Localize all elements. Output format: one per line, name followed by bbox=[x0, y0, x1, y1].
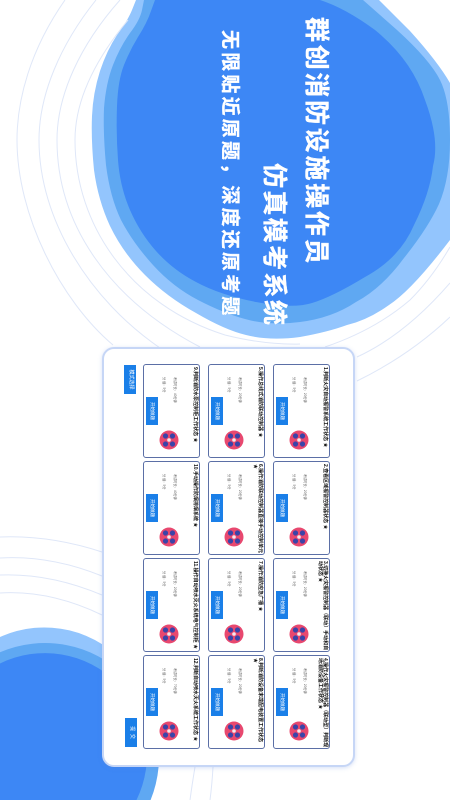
card 10: 开始做题 bbox=[150, 499, 155, 517]
button: mode select bbox=[124, 365, 136, 394]
button: submit: 提 交 bbox=[129, 726, 135, 739]
card 9: 分 值：5分 bbox=[162, 377, 166, 392]
card 11: 考试时长：20分钟 bbox=[173, 571, 177, 597]
top blob: middle layer bbox=[104, 0, 450, 323]
card 6 bbox=[208, 461, 265, 555]
bottom blob bbox=[0, 627, 159, 800]
panel: exam list bbox=[102, 347, 355, 767]
card 1: 开始做题 bbox=[280, 402, 285, 420]
card 9: 9.判断消防水泵控制柜工作状态 ★ bbox=[192, 367, 198, 443]
card 7: 考试时长：20分钟 bbox=[238, 571, 242, 597]
card 1 bbox=[273, 364, 330, 458]
subtitle: 无限贴近原题，深度还原考题 bbox=[219, 30, 240, 319]
button: mode select: 模式选择 bbox=[128, 369, 134, 390]
card 9: 考试时长：40分钟 bbox=[173, 377, 177, 403]
card 10: 分 值：5分 bbox=[162, 474, 166, 489]
card 4: 开始做题 bbox=[280, 693, 285, 711]
card 8: 8.判断消防设备末端配电装置工作状态 ★ bbox=[252, 658, 264, 742]
card 11: 分 值：5分 bbox=[162, 571, 166, 586]
card 5: 开始做题 bbox=[215, 402, 220, 420]
card 8: 分 值：5分 bbox=[227, 668, 231, 683]
card 5: 分 值：5分 bbox=[227, 377, 231, 392]
card 3: 考试时长：20分钟 bbox=[303, 571, 307, 597]
card 12: 12.判断自动喷水灭火系统工作状态 ★ bbox=[192, 658, 198, 741]
card 12 bbox=[143, 655, 200, 749]
card 1: 分 值：5分 bbox=[292, 377, 296, 392]
card 4: 分 值：5分 bbox=[292, 668, 296, 683]
card 7: 7.操作消防应急广播 ★ bbox=[258, 561, 264, 612]
card 2 bbox=[273, 461, 330, 555]
card 11: 11.操作自动喷水灭火系统电气控制柜 ★ bbox=[192, 561, 198, 649]
card 6: 分 值：5分 bbox=[227, 474, 231, 489]
card 10: 10.手动操作防烟排烟系统 ★ bbox=[192, 464, 198, 527]
card 9 bbox=[143, 364, 200, 458]
card 9: 开始做题 bbox=[150, 402, 155, 420]
card 10: 考试时长：40分钟 bbox=[173, 474, 177, 500]
card 2: 考试时长：20分钟 bbox=[303, 474, 307, 500]
card 12: 开始做题 bbox=[150, 693, 155, 711]
card 5: 5.操作总线式消防联动控制器 ★ bbox=[258, 367, 264, 438]
card 8: 考试时长：20分钟 bbox=[238, 668, 242, 694]
card 7: 开始做题 bbox=[215, 596, 220, 614]
title line 1: 群创消防设施操作员 bbox=[302, 17, 330, 266]
card 11 bbox=[143, 558, 200, 652]
card 6: 6.操作消防联动控制器直接手动控制单元 ★ bbox=[252, 464, 264, 553]
button: submit bbox=[126, 718, 137, 747]
card 8 bbox=[208, 655, 265, 749]
top blob: light layer bbox=[92, 0, 450, 339]
card 6: 开始做题 bbox=[215, 499, 220, 517]
card 7 bbox=[208, 558, 265, 652]
card 12: 考试时长：70分钟 bbox=[173, 668, 177, 694]
card 4: 考试时长：20分钟 bbox=[303, 668, 307, 694]
card 12: 分 值：5分 bbox=[162, 668, 166, 683]
card 3: 3.切换火灾报警控制器（联动）手动和自动状态 ★ bbox=[317, 561, 328, 650]
card 11: 开始做题 bbox=[150, 596, 155, 614]
card 7: 分 值：5分 bbox=[227, 571, 231, 586]
card 4: 4.操作火灾报警控制器（联动型）判断现场消防设备工作状态 ★ bbox=[317, 658, 328, 747]
card 2: 分 值：5分 bbox=[292, 474, 296, 489]
card 1: 1.判断火灾自动报警系统工作状态 ★ bbox=[322, 367, 328, 448]
card 3 bbox=[273, 558, 330, 652]
card 5: 考试时长：20分钟 bbox=[238, 377, 242, 403]
card 1: 考试时长：20分钟 bbox=[303, 377, 307, 403]
card 6: 考试时长：20分钟 bbox=[238, 474, 242, 500]
card 3: 开始做题 bbox=[280, 596, 285, 614]
card 5 bbox=[208, 364, 265, 458]
top blob: dark layer bbox=[117, 0, 435, 306]
card 10 bbox=[143, 461, 200, 555]
card 8: 开始做题 bbox=[215, 693, 220, 711]
card 2: 开始做题 bbox=[280, 499, 285, 517]
card 2: 2.查看区域报警控制器状态 ★ bbox=[322, 464, 328, 530]
title line 2: 仿真模考系统 bbox=[260, 163, 288, 327]
card 4 bbox=[273, 655, 330, 749]
card 3: 分 值：5分 bbox=[292, 571, 296, 586]
